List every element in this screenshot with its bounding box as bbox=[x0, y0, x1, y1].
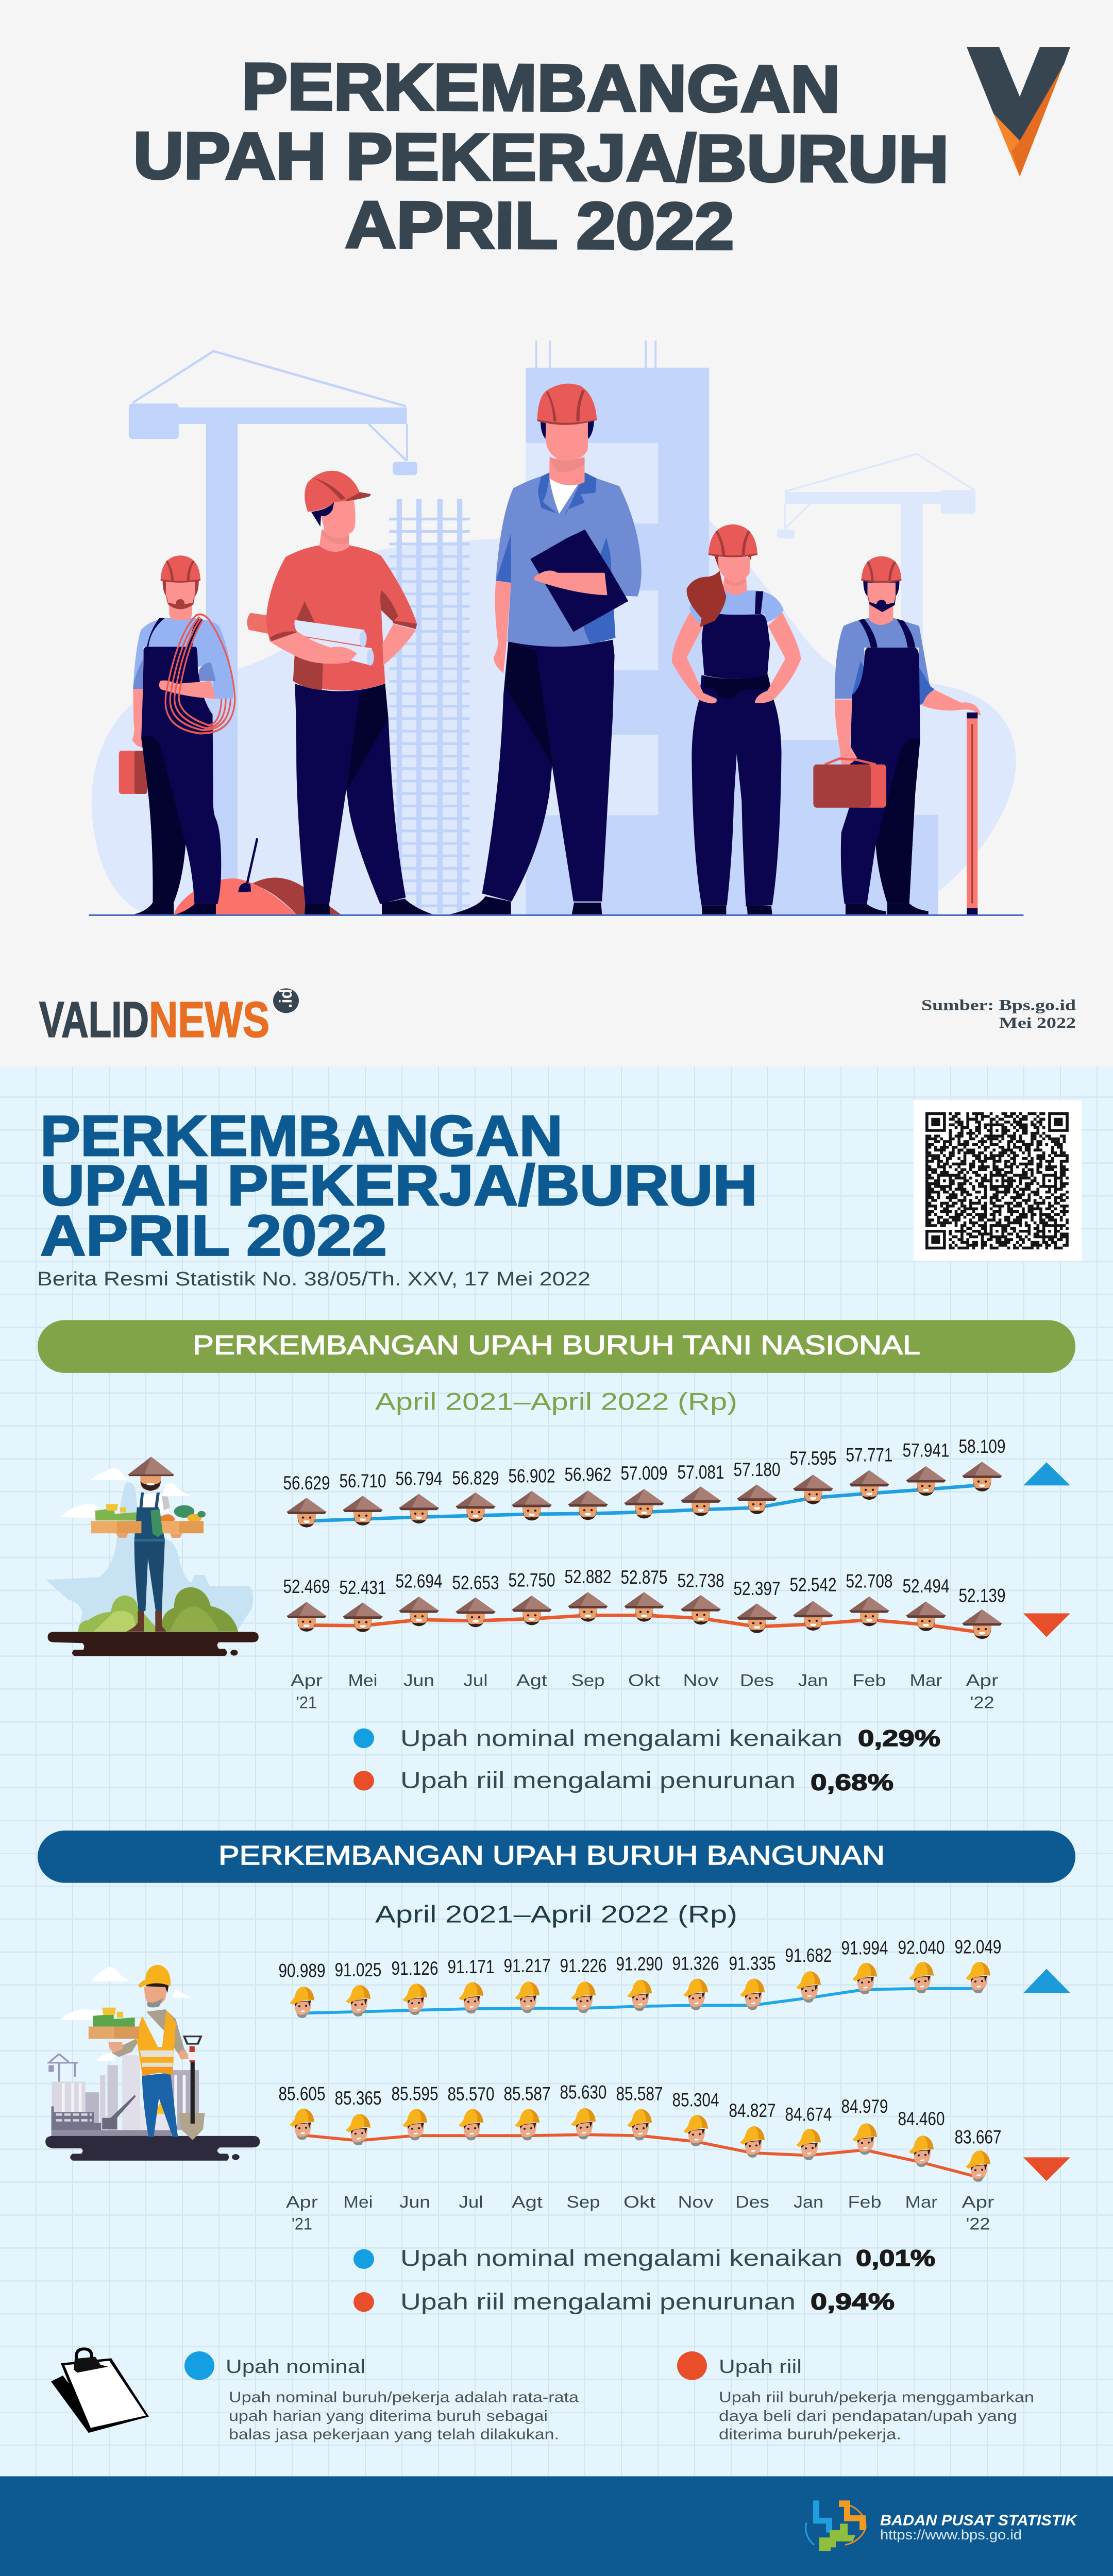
summary: bangunan: 0,01% bbox=[856, 2245, 935, 2271]
section banner: buruh tani bbox=[38, 1320, 1075, 1373]
definition: upah nominal: balas jasa pekerjaan yang telah dilakukan. bbox=[229, 2426, 559, 2443]
value labels: nominal tani: 56.962 bbox=[565, 1464, 612, 1485]
arrow: nominal up bbox=[1023, 1462, 1070, 1485]
value labels: nominal bangunan: 91.217 bbox=[504, 1955, 551, 1977]
axis labels: months: Mei bbox=[343, 2193, 373, 2212]
value labels: nominal tani: 57.081 bbox=[677, 1462, 724, 1483]
value labels: riil bangunan bbox=[279, 2081, 1002, 2148]
infographic panel background bbox=[0, 1066, 1113, 2576]
value labels: nominal bangunan: 92.040 bbox=[898, 1937, 945, 1958]
axis labels: months: '21 bbox=[292, 2215, 312, 2233]
definition: upah riil: daya beli dari pendapatan/upah yang bbox=[719, 2408, 1017, 2425]
value labels: nominal bangunan: 91.226 bbox=[560, 1955, 607, 1977]
axis labels: months: Des bbox=[735, 2193, 769, 2212]
illustration: farmer bbox=[46, 1456, 259, 1656]
line: upah nominal bangunan bbox=[302, 1989, 978, 2013]
value labels: nominal bangunan: 91.682 bbox=[785, 1945, 832, 1967]
axis labels: months bbox=[291, 1671, 999, 1712]
axis labels: months: Apr bbox=[962, 2193, 994, 2212]
markers: farmer heads nominal bbox=[286, 1462, 1002, 1528]
value labels: riil tani: 52.708 bbox=[846, 1570, 893, 1592]
logo: Validnews.id: NEWS bbox=[149, 992, 269, 1048]
summary: bangunan: 0,94% bbox=[811, 2289, 895, 2314]
axis labels: months: Apr bbox=[291, 1671, 323, 1690]
definition: upah nominal: upah harian yang diterima buruh sebagai bbox=[229, 2408, 548, 2425]
chart: upah buruh tani bbox=[283, 1436, 1070, 1712]
value labels: riil tani: 52.431 bbox=[340, 1577, 386, 1599]
definition: upah riil: Upah riil buruh/pekerja menggambarkan bbox=[719, 2389, 1034, 2406]
value labels: riil bangunan: 85.605 bbox=[279, 2083, 326, 2105]
value labels: riil tani: 52.750 bbox=[508, 1569, 555, 1591]
value labels: nominal tani: 56.629 bbox=[283, 1472, 330, 1494]
value labels: nominal tani: 56.829 bbox=[452, 1467, 499, 1489]
footer text: BPS: BADAN PUSAT STATISTIK bbox=[880, 2512, 1078, 2529]
axis labels: months: Sep bbox=[571, 1671, 605, 1690]
heading: main title: UPAH PEKERJA/BURUH bbox=[40, 1154, 757, 1217]
value labels: nominal tani: 57.009 bbox=[620, 1463, 668, 1484]
axis labels: months: Jul bbox=[464, 1671, 488, 1690]
axis labels: months: Agt bbox=[512, 2193, 543, 2212]
worker 1: rope bbox=[119, 555, 235, 914]
icon: V logo bbox=[967, 47, 1070, 177]
value labels: riil tani: 52.694 bbox=[396, 1570, 443, 1592]
axis labels: months: '22 bbox=[970, 1693, 994, 1712]
summary: tani: 0,29% bbox=[858, 1725, 940, 1751]
worker 5: toolbox bbox=[813, 556, 981, 915]
line: upah riil bangunan bbox=[302, 2134, 978, 2177]
footer text: BPS: https://www.bps.go.id bbox=[880, 2527, 1022, 2543]
value labels: nominal bangunan: 91.171 bbox=[448, 1956, 495, 1978]
crane: left bbox=[129, 351, 417, 914]
source note bbox=[921, 996, 1076, 1031]
summary: bangunan bbox=[353, 2245, 935, 2314]
illustration: construction worker bbox=[45, 1965, 260, 2161]
value labels: riil bangunan: 85.365 bbox=[335, 2088, 382, 2109]
heading: main title: APRIL 2022 bbox=[40, 1204, 387, 1268]
value labels: nominal bangunan: 90.989 bbox=[279, 1960, 326, 1981]
definition: upah riil bbox=[677, 2351, 1034, 2443]
axis labels: months: Sep bbox=[567, 2193, 600, 2212]
section banner: buruh bangunan bbox=[38, 1831, 1075, 1883]
axis labels: months: Mei bbox=[348, 1671, 378, 1690]
value labels: riil tani: 52.542 bbox=[789, 1574, 837, 1596]
definition: upah nominal bbox=[184, 2351, 579, 2443]
definition: upah riil: Upah riil bbox=[719, 2356, 802, 2378]
axis labels: months: Agt bbox=[516, 1671, 547, 1690]
cover title: APRIL 2022 bbox=[345, 188, 734, 263]
value labels: nominal tani: 58.109 bbox=[959, 1436, 1006, 1458]
axis labels: months: Jan bbox=[798, 1671, 828, 1690]
axis labels: months: Jun bbox=[399, 2193, 430, 2212]
footer text: BPS bbox=[880, 2512, 1078, 2543]
source note: Mei 2022 bbox=[999, 1014, 1076, 1031]
definition: upah nominal: Upah nominal bbox=[226, 2356, 365, 2378]
logo: Validnews.id bbox=[39, 988, 299, 1048]
arrow: riil down bbox=[1023, 2157, 1070, 2181]
cover title: PERKEMBANGAN bbox=[241, 49, 840, 126]
illustration: construction workers bbox=[89, 341, 1024, 916]
building: low block bbox=[709, 740, 938, 914]
section subtitle: period: April 2021–April 2022 (Rp) bbox=[375, 1901, 737, 1928]
definition: upah riil: diterima buruh/pekerja. bbox=[719, 2426, 901, 2443]
worker 2: blueprints bbox=[247, 471, 433, 914]
axis labels: months: Nov bbox=[678, 2193, 714, 2212]
value labels: nominal bangunan: 92.049 bbox=[954, 1936, 1002, 1958]
QR code bbox=[914, 1100, 1082, 1261]
summary: bangunan: Upah riil mengalami penurunan bbox=[400, 2289, 796, 2314]
value labels: riil bangunan: 84.979 bbox=[841, 2096, 888, 2117]
value labels: nominal tani bbox=[283, 1436, 1006, 1494]
axis labels: months: Okt bbox=[623, 2193, 655, 2212]
value labels: riil bangunan: 84.460 bbox=[898, 2108, 945, 2130]
axis labels: months: Jul bbox=[459, 2193, 483, 2212]
worker 4: woman bbox=[672, 524, 801, 914]
axis labels: months: '22 bbox=[966, 2215, 990, 2233]
logo: Validnews.id: .id bbox=[276, 989, 296, 1008]
line: upah nominal tani bbox=[307, 1485, 982, 1521]
value labels: riil bangunan: 85.570 bbox=[448, 2083, 495, 2105]
axis labels: months: Mar bbox=[905, 2193, 937, 2212]
logo: Validnews.id: VALID bbox=[39, 992, 149, 1048]
summary: tani: 0,68% bbox=[811, 1769, 893, 1795]
value labels: riil bangunan: 84.827 bbox=[729, 2100, 776, 2122]
crane: right bbox=[777, 454, 975, 701]
axis labels: months: Jun bbox=[403, 1671, 434, 1690]
axis labels: months: Apr bbox=[966, 1671, 999, 1690]
axis labels: months: Nov bbox=[683, 1671, 719, 1690]
cover title: UPAH PEKERJA/BURUH bbox=[133, 118, 949, 196]
value labels: riil tani: 52.139 bbox=[959, 1585, 1006, 1606]
heading: main title: PERKEMBANGAN bbox=[40, 1104, 563, 1168]
value labels: riil bangunan: 85.587 bbox=[616, 2083, 663, 2105]
axis labels: months: '21 bbox=[296, 1693, 317, 1712]
value labels: nominal tani: 56.794 bbox=[396, 1468, 443, 1489]
markers: farmer heads riil bbox=[286, 1592, 1002, 1639]
icon: clipboard bbox=[51, 2349, 149, 2433]
subtitle: release number: Berita Resmi Statistik No. 38/05/Th. XXV, 17 Mei 2022 bbox=[37, 1268, 591, 1290]
value labels: riil bangunan: 85.304 bbox=[672, 2089, 719, 2111]
markers: builder heads riil bbox=[290, 2108, 990, 2182]
value labels: nominal bangunan: 91.335 bbox=[729, 1953, 776, 1974]
summary: tani: Upah nominal mengalami kenaikan bbox=[400, 1725, 842, 1751]
worker 3: clipboard bbox=[450, 384, 642, 914]
section banner: buruh tani: PERKEMBANGAN UPAH BURUH TANI NASIONAL bbox=[193, 1330, 920, 1360]
axis labels: months: Feb bbox=[852, 1671, 886, 1690]
value labels: riil tani: 52.397 bbox=[734, 1578, 781, 1600]
value labels: nominal bangunan: 91.994 bbox=[841, 1937, 888, 1959]
value labels: riil bangunan: 85.587 bbox=[504, 2083, 551, 2105]
axis labels: months: Des bbox=[740, 1671, 774, 1690]
summary: bangunan: Upah nominal mengalami kenaikan bbox=[400, 2245, 842, 2271]
section banner: buruh bangunan: PERKEMBANGAN UPAH BURUH BANGUNAN bbox=[218, 1841, 885, 1871]
value labels: riil bangunan: 85.630 bbox=[560, 2081, 607, 2103]
line: upah riil tani bbox=[307, 1615, 982, 1633]
heading: main title bbox=[40, 1104, 757, 1268]
cover background bbox=[0, 0, 1113, 1066]
axis labels: months bbox=[286, 2193, 994, 2233]
value labels: nominal tani: 56.902 bbox=[508, 1465, 555, 1487]
value labels: riil bangunan: 83.667 bbox=[954, 2126, 1002, 2148]
background blob bbox=[92, 520, 1016, 914]
section subtitle: period: April 2021–April 2022 (Rp) bbox=[375, 1389, 737, 1415]
arrow: nominal up bbox=[1023, 1969, 1070, 1993]
value labels: riil bangunan: 85.595 bbox=[392, 2083, 439, 2105]
axis labels: months: Okt bbox=[628, 1671, 660, 1690]
value labels: nominal tani: 56.710 bbox=[340, 1470, 386, 1492]
value labels: riil tani: 52.653 bbox=[452, 1572, 499, 1594]
definition: upah nominal: Upah nominal buruh/pekerja adalah rata-rata bbox=[229, 2389, 579, 2406]
cover title bbox=[132, 48, 949, 264]
mound and shovel bbox=[174, 838, 341, 914]
source note: Sumber: Bps.go.id bbox=[921, 996, 1076, 1013]
axis labels: months: Jan bbox=[794, 2193, 823, 2212]
value labels: nominal tani: 57.180 bbox=[734, 1459, 781, 1481]
footer bar bbox=[0, 2476, 1113, 2576]
value labels: nominal bangunan: 91.126 bbox=[392, 1958, 439, 1979]
value labels: riil bangunan: 84.674 bbox=[785, 2104, 832, 2125]
axis labels: months: Mar bbox=[910, 1671, 942, 1690]
ground line bbox=[89, 914, 1024, 916]
value labels: nominal bangunan: 91.025 bbox=[335, 1959, 382, 1981]
rebar tower bbox=[399, 499, 460, 913]
axis labels: months: Feb bbox=[848, 2193, 882, 2212]
summary: tani: Upah riil mengalami penurunan bbox=[400, 1768, 796, 1793]
value labels: riil tani: 52.494 bbox=[903, 1575, 950, 1597]
value labels: riil tani: 52.469 bbox=[283, 1576, 330, 1598]
value labels: nominal tani: 57.941 bbox=[903, 1439, 950, 1462]
summary: tani bbox=[353, 1725, 940, 1795]
value labels: nominal tani: 57.771 bbox=[846, 1444, 893, 1466]
value labels: riil tani: 52.738 bbox=[677, 1570, 724, 1591]
value labels: nominal bangunan: 91.326 bbox=[672, 1953, 719, 1974]
value labels: riil tani: 52.882 bbox=[565, 1566, 612, 1588]
arrow: riil down bbox=[1023, 1613, 1070, 1637]
chart: upah buruh bangunan bbox=[279, 1936, 1070, 2233]
markers: builder heads nominal bbox=[290, 1962, 990, 2018]
logo: BPS bbox=[806, 2500, 866, 2551]
value labels: nominal bangunan: 91.290 bbox=[616, 1953, 663, 1975]
value labels: riil tani: 52.875 bbox=[620, 1567, 668, 1588]
value labels: nominal tani: 57.595 bbox=[789, 1448, 837, 1469]
building: main tower bbox=[526, 341, 709, 914]
value labels: nominal bangunan bbox=[279, 1936, 1002, 1981]
axis labels: months: Apr bbox=[286, 2193, 318, 2212]
value labels: riil tani bbox=[283, 1566, 1006, 1606]
